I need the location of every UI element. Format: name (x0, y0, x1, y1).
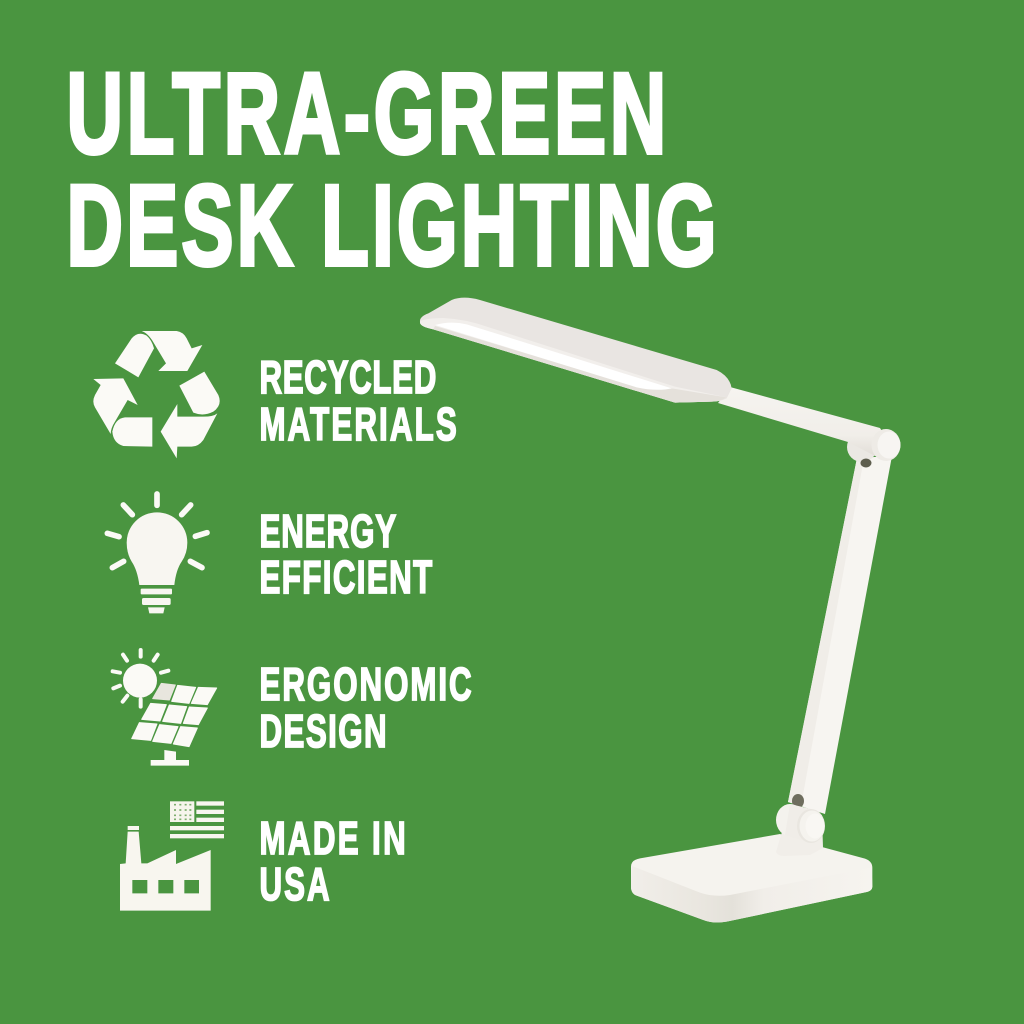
label: energy efficient (260, 506, 432, 604)
icon: recycling arrows (93, 331, 220, 458)
label: made in usa: MADE IN (260, 813, 406, 865)
label: recycled materials: RECYCLED (260, 352, 436, 404)
feature: made in usa (120, 801, 406, 911)
desk lamp (420, 298, 900, 923)
light panel (435, 323, 672, 390)
title (66, 49, 717, 290)
title: ULTRA-GREEN (66, 49, 666, 178)
icon: factory and flag (120, 801, 224, 911)
upper joint body (847, 432, 877, 468)
lamp lower hinge (776, 794, 825, 856)
title: DESK LIGHTING (66, 161, 717, 290)
label: recycled materials: MATERIALS (260, 399, 457, 451)
label: made in usa: USA (260, 859, 330, 911)
upper arm (718, 387, 895, 456)
feature: recycled materials (93, 331, 457, 458)
label: ergonomic design (260, 659, 472, 758)
upper joint cap (872, 429, 900, 461)
label: energy efficient: EFFICIENT (260, 552, 432, 604)
lamp head and upper arm (420, 298, 900, 468)
label: ergonomic design: ERGONOMIC (260, 659, 472, 711)
feature list (93, 331, 472, 911)
lamp vertical arm (788, 456, 892, 814)
label: recycled materials (260, 352, 457, 451)
icon: light bulb (107, 494, 207, 613)
lamp head (420, 298, 732, 403)
label: ergonomic design: DESIGN (260, 706, 387, 758)
icon: sun and solar panel (113, 650, 217, 766)
label: energy efficient: ENERGY (260, 506, 396, 558)
feature: ergonomic design (113, 650, 472, 766)
feature: energy efficient (107, 494, 432, 613)
label: made in usa (260, 813, 406, 911)
lamp base (631, 834, 872, 923)
